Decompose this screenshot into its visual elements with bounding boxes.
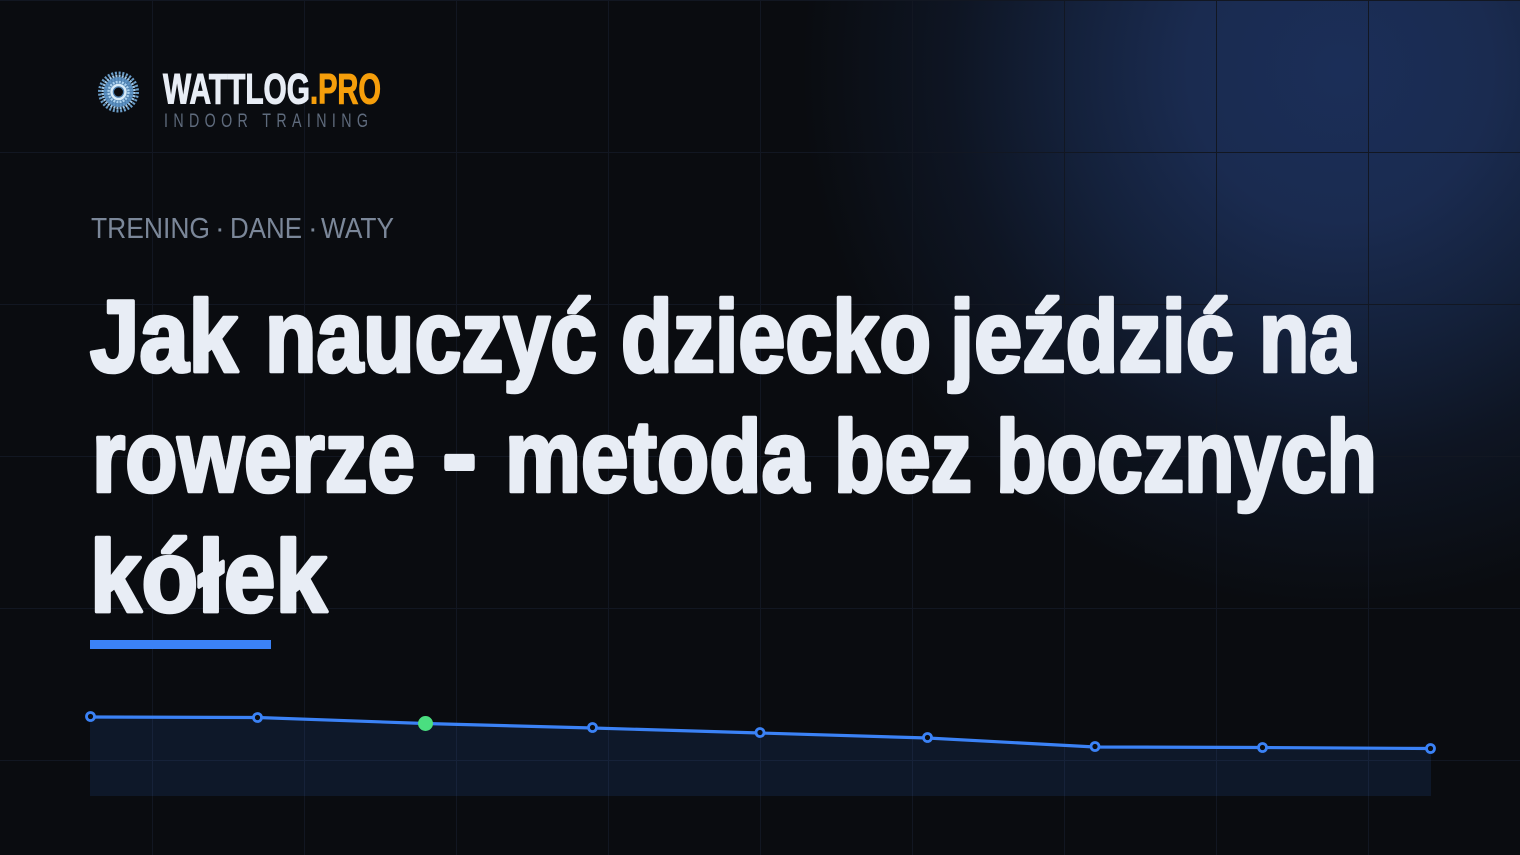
chart line [90,717,1430,748]
brand wordmark: WATTLOG [163,66,310,114]
title: kółek [90,520,327,634]
title: jeździć [948,280,1234,394]
brand wordmark: .PRO [310,66,381,114]
title: dziecko [621,280,931,394]
category label [91,213,394,245]
title: metoda [505,400,810,514]
category label: TRENING [91,213,210,245]
title: nauczyć [265,280,597,394]
title: – [444,398,474,512]
title: bez [834,400,972,514]
title: Jak [90,280,238,394]
category label: · [308,213,318,245]
category label: · [215,213,225,245]
title: rowerze [92,400,415,514]
highlighted data point [418,716,433,731]
icon: cassette gear logo [100,73,138,111]
title: na [1259,280,1356,394]
brand tagline: INDOOR TRAINING [164,110,368,132]
category label: DANE [230,213,302,245]
title underline accent [90,640,271,649]
chart data points [86,712,1434,752]
chart area fill [90,717,1431,796]
title: bocznych [996,400,1377,514]
line chart [86,712,1434,796]
title [90,280,1377,634]
category label: WATY [321,213,394,245]
